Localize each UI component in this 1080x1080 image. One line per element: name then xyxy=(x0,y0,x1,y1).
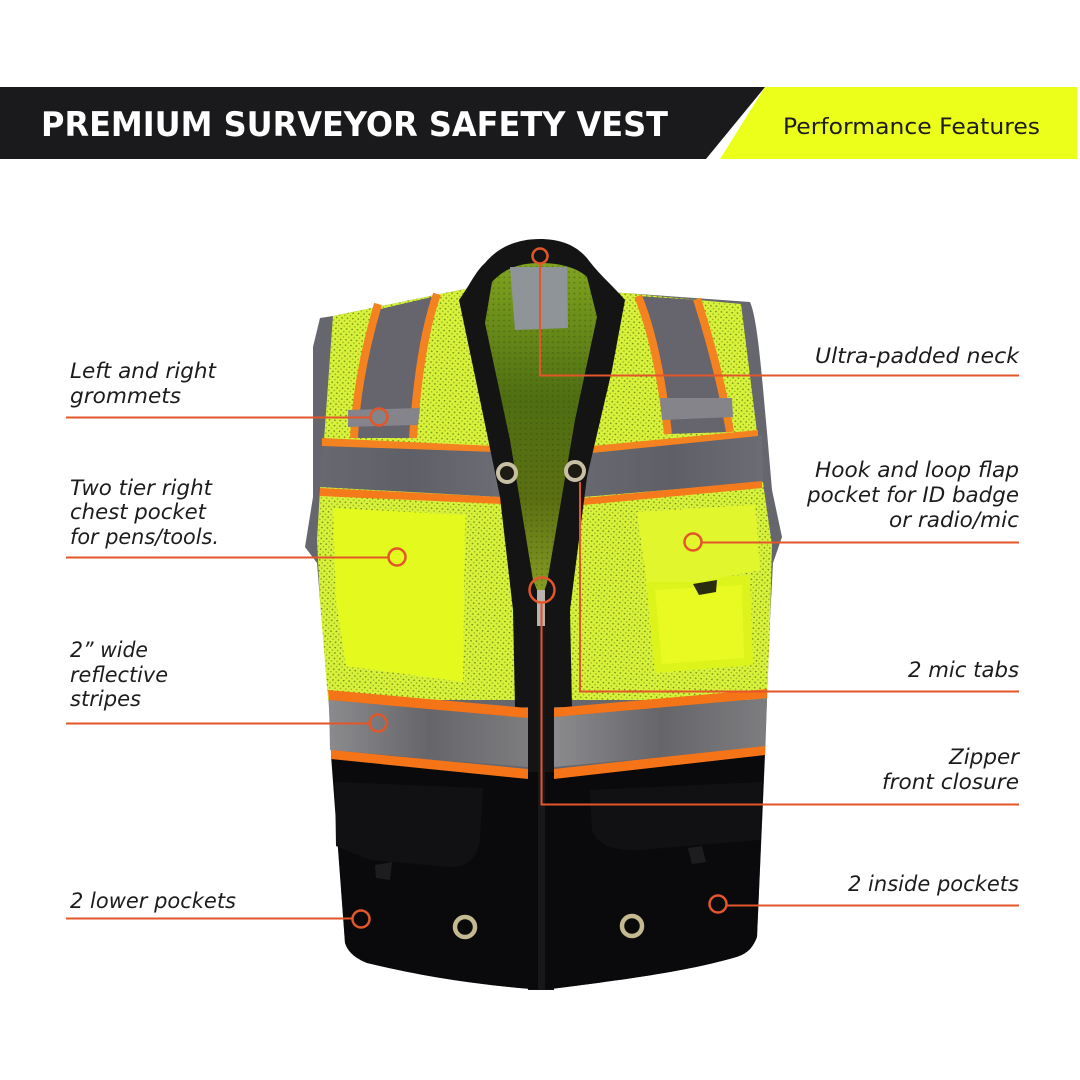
callout: hook and loop pocket xyxy=(684,458,1019,550)
right mic tab xyxy=(660,398,733,420)
callout: mic tabs: 2 mic tabs xyxy=(908,658,1019,682)
lower pocket tabs xyxy=(375,846,706,880)
header: performance features tag: Performance Features xyxy=(783,115,1040,140)
left chest pocket xyxy=(333,508,465,682)
header: performance features tag xyxy=(720,87,1077,159)
right shoulder strap xyxy=(638,296,730,434)
callout: left and right grommets xyxy=(66,359,388,426)
neck collar and zipper band xyxy=(459,239,625,990)
lower left pocket flap xyxy=(335,782,483,867)
callout: inside pockets xyxy=(710,872,1019,912)
callout: ultra-padded neck xyxy=(532,248,1020,376)
callout: ultra-padded neck: Ultra-padded neck xyxy=(815,344,1020,368)
callout: hook and loop pocket: or radio/mic xyxy=(889,508,1019,532)
left mic tab xyxy=(348,408,420,427)
chest eyelets xyxy=(498,462,584,482)
callout: left and right grommets: Left and right xyxy=(70,359,217,383)
vest silhouette xyxy=(305,288,782,990)
callout: lower pockets: 2 lower pockets xyxy=(70,889,236,913)
callout: hook and loop pocket: Hook and loop flap xyxy=(815,458,1019,482)
safety vest illustration xyxy=(305,239,782,990)
callout: lower pockets xyxy=(66,889,370,928)
callout: two tier chest pocket: Two tier right xyxy=(70,476,213,500)
callout: left and right grommets: grommets xyxy=(70,384,181,408)
left shoulder strap xyxy=(352,294,437,438)
callout: inside pockets: 2 inside pockets xyxy=(848,872,1019,896)
callout: reflective stripes: 2” wide xyxy=(70,638,148,662)
callout: reflective stripes: stripes xyxy=(70,687,141,711)
waist lower orange trim xyxy=(331,746,765,779)
waist reflective stripe xyxy=(328,689,767,767)
black lower body xyxy=(331,750,765,990)
inner neck xyxy=(485,263,597,600)
chest reflective stripe xyxy=(320,430,763,505)
right hook and loop pocket xyxy=(637,505,760,673)
callout: hook and loop pocket: pocket for ID badge xyxy=(806,483,1019,507)
callout: two tier chest pocket xyxy=(66,476,406,566)
mesh body xyxy=(317,288,772,700)
zipper xyxy=(537,590,545,990)
callout: zipper front closure: Zipper xyxy=(948,745,1020,769)
lower grommets xyxy=(455,916,642,937)
callout: reflective stripes: reflective xyxy=(70,663,168,687)
callout: zipper front closure: front closure xyxy=(882,770,1019,794)
header: title bar: PREMIUM SURVEYOR SAFETY VEST xyxy=(41,105,669,145)
header: title bar xyxy=(0,87,765,159)
callout: zipper front closure xyxy=(530,578,1020,804)
callout: two tier chest pocket: for pens/tools. xyxy=(70,525,219,549)
lower right pocket flap xyxy=(590,782,762,850)
callout: two tier chest pocket: chest pocket xyxy=(70,500,207,524)
callout: reflective stripes xyxy=(66,638,386,732)
callout: mic tabs xyxy=(580,482,1019,692)
